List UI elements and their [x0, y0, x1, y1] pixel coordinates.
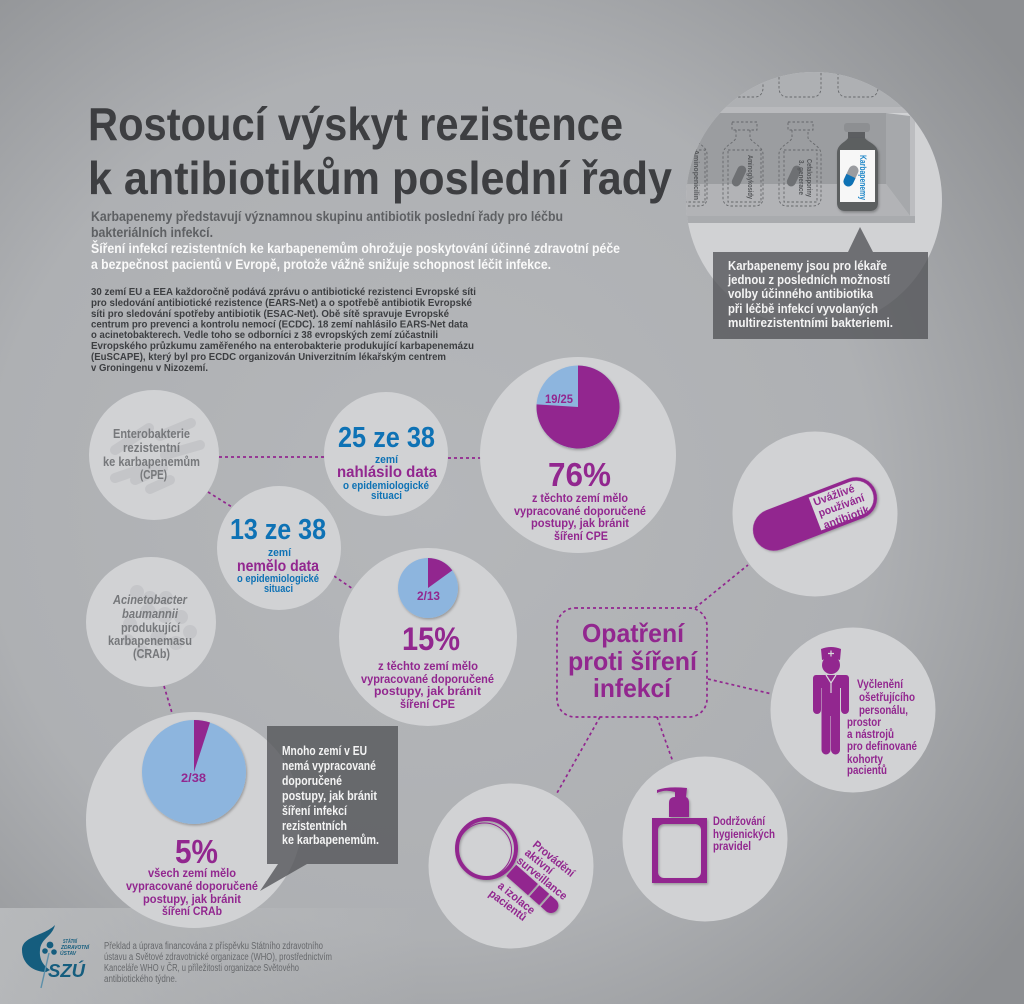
icon: capsule [747, 471, 883, 557]
intro text: Karbapenemy představují významnou skupinu antibiotik poslední řady pro léčbu [91, 208, 563, 224]
panel: 5 percent [86, 712, 302, 928]
panel: 76 percent: 76% [548, 456, 611, 493]
panel: 15 percent: 2/13 [417, 589, 440, 603]
panel: prudent antibiotic use: používání [817, 492, 867, 520]
callout: carbapenems: při léčbě infekcí vyvolaných [728, 301, 878, 316]
intro text: Šíření infekcí rezistentních ke karbapenemům ohrožuje poskytování účinné zdravotní péče [91, 239, 620, 256]
panel: 15 percent: postupy, jak bránit [374, 684, 481, 698]
callout: missing guidelines: Mnoho zemí v EU [282, 743, 367, 758]
panel: 76 percent: z těchto zemí mělo [532, 491, 628, 505]
panel: 5 percent: šíření CRAb [162, 904, 222, 918]
pie chart: 2/38 [142, 720, 246, 824]
panel: dedicated staff [770, 628, 936, 792]
panel: surveillance: aktivní [522, 847, 556, 878]
panel: 25 of 38 countries: nahlásilo data [337, 464, 437, 481]
panel: 15 percent: z těchto zemí mělo [378, 659, 478, 673]
pie chart: 19/25 [536, 366, 620, 448]
panel: CPE bacteria: rezistentní [123, 440, 180, 455]
panel: measures heading: infekcí [593, 673, 672, 703]
panel: 13 of 38 countries: situaci [264, 583, 293, 595]
body text: Evropského průzkumu zaměřeného na enterobakterie produkující karbapenemázu [91, 340, 474, 352]
panel: 25 of 38 countries: situaci [371, 490, 402, 502]
body text: centrum pro prevenci a kontrolu nemocí (ECDC). 18 zemí nahlásilo EARS-Net data [91, 318, 468, 330]
panel: 25 of 38 countries [324, 392, 448, 516]
panel: measures heading [557, 608, 707, 717]
panel: CPE bacteria [89, 390, 219, 520]
panel: dedicated staff: prostor [847, 717, 881, 729]
callout: carbapenems: jednou z posledních možností [727, 272, 890, 287]
panel: hygiene: hygienických [713, 829, 775, 841]
icon: grey capsules [732, 166, 802, 186]
panel: dedicated staff: personálu, [859, 705, 908, 717]
panel: surveillance: a izolace [495, 880, 537, 917]
panel: dedicated staff: kohorty [847, 754, 884, 766]
panel: 76 percent: vypracované doporučené [514, 504, 646, 518]
panel: 5 percent: postupy, jak bránit [143, 892, 241, 906]
panel: CPE bacteria: Enterobakterie [113, 426, 190, 441]
panel: 5 percent: 5% [175, 833, 218, 870]
panel: prudent antibiotic use: Uvážlivé [812, 483, 856, 509]
body text: síti pro sledování spotřeby antibiotik (ESAC-Net). Obě sítě spravuje Evropské [91, 308, 449, 320]
panel: surveillance [428, 784, 594, 948]
panel: 76 percent [480, 357, 676, 553]
body text: v Groningenu v Nizozemí. [91, 362, 208, 374]
panel: CRAb bacteria: (CRAb) [133, 646, 170, 661]
intro text: a bezpečnost pacientů v Evropě, protože vážně snižuje schopnost léčit infekce. [91, 256, 551, 272]
panel: 5 percent: 2/38 [181, 771, 206, 785]
panel: 25 of 38 countries: o epidemiologické [343, 480, 429, 492]
shelf bottle labels: Aminopenicilin [692, 150, 701, 200]
callout: missing guidelines [260, 726, 398, 891]
panel: 5 percent: všech zemí mělo [148, 866, 236, 880]
body text: o acinetobakterech. Vedle toho se odborníci z 38 evropských zemí zúčastnili [91, 329, 438, 341]
panel: dedicated staff: pacientů [847, 765, 887, 777]
callout: missing guidelines: ke karbapenemům. [282, 832, 379, 847]
body text: (EuSCAPE), který byl pro ECDC organizován Univerzitním lékařským centrem [91, 351, 446, 363]
panel: hygiene: Dodržování [713, 816, 766, 828]
icon: carbapenem bottle: Karbapenemy [858, 155, 868, 200]
panel: measures heading: proti šíření [568, 646, 698, 676]
panel: hygiene: pravidel [713, 841, 751, 853]
panel: measures heading: Opatření [582, 618, 685, 648]
panel: 13 of 38 countries: 13 ze 38 [230, 514, 326, 546]
pie chart: 2/13 [398, 558, 458, 618]
connector lines [164, 457, 772, 793]
body text [91, 286, 476, 374]
panel: CRAb bacteria: baumannii [122, 606, 178, 621]
logo: SZU: ZDRAVOTNÍ [60, 944, 90, 951]
callout: missing guidelines: doporučené [282, 773, 342, 788]
panel: 15 percent: vypracované doporučené [361, 672, 494, 686]
panel: surveillance: pacientů [486, 888, 529, 924]
panel: dedicated staff: pro definované [847, 741, 917, 753]
panel: 76 percent: šíření CPE [554, 529, 608, 543]
panel: 25 of 38 countries: zemí [375, 454, 399, 466]
panel: CRAb bacteria: produkující [121, 620, 180, 635]
intro text: bakteriálních infekcí. [91, 224, 213, 240]
shelf bottle labels [692, 150, 814, 200]
title: k antibiotikům poslední řady [88, 152, 672, 204]
icon: soap dispenser [652, 787, 707, 883]
callout: missing guidelines: rezistentních [282, 818, 347, 833]
panel: surveillance: Provádění [530, 839, 577, 880]
callout: carbapenems: Karbapenemy jsou pro lékaře [728, 258, 887, 273]
title: Rostoucí výskyt rezistence [88, 98, 623, 150]
panel: 76 percent: 19/25 [545, 392, 573, 406]
panel: prudent antibiotic use: antibiotik [822, 504, 872, 532]
panel: CRAb bacteria: Acinetobacter [112, 592, 188, 607]
panel: 13 of 38 countries: o epidemiologické [237, 573, 319, 585]
logo: SZU: SZÚ [48, 960, 86, 981]
callout: missing guidelines: šíření infekcí [282, 803, 347, 818]
shelf bottle labels: Aminoglykosidy [746, 155, 755, 200]
panel: 13 of 38 countries: nemělo data [237, 558, 319, 575]
panel: 25 of 38 countries: 25 ze 38 [338, 422, 435, 454]
panel: CPE bacteria: (CPE) [140, 467, 167, 482]
logo: SZU [22, 925, 90, 988]
footer text: ústavu a Světové zdravotnické organizace (WHO), prostřednictvím [104, 952, 332, 963]
footer text [104, 941, 332, 985]
panel: hygiene [622, 756, 788, 922]
body text: pro sledování antibiotické rezistence (EARS-Net) a o spotřebě antibiotik Evropské [91, 297, 472, 309]
body text: 30 zemí EU a EEA každoročně podává zprávu o antibiotické rezistenci Evropské síti [91, 286, 476, 298]
logo: SZU: STÁTNÍ [63, 938, 78, 945]
icon: carbapenem bottle [837, 123, 878, 211]
icon: rod bacteria [115, 423, 200, 489]
panel: dedicated staff: a nástrojů [847, 729, 894, 741]
panel: prudent antibiotic use [732, 432, 898, 596]
footer text: Kanceláře WHO v ČR, u příležitosti organizace Světového [104, 961, 299, 974]
panel: CRAb bacteria: karbapenemasu [108, 633, 192, 648]
callout: carbapenems: multirezistentními bakteriemi. [728, 315, 893, 330]
panel: 13 of 38 countries: zemí [268, 547, 292, 559]
title [88, 98, 672, 204]
panel: dedicated staff: Vyčlenění [857, 679, 904, 691]
icon: magnifying glass [457, 819, 561, 916]
footer text: antibiotického týdne. [104, 974, 177, 985]
panel: dedicated staff: ošetřujícího [859, 692, 915, 704]
icon: nurse [813, 647, 849, 754]
callout: carbapenems: volby účinného antibiotika [728, 286, 874, 301]
intro text [91, 208, 620, 272]
icon: cocci bacteria [122, 585, 197, 659]
panel: CPE bacteria: ke karbapenemům [103, 454, 200, 469]
callout: missing guidelines: nemá vypracované [282, 758, 376, 773]
callout: missing guidelines: postupy, jak bránit [282, 788, 378, 803]
panel: 13 of 38 countries [217, 486, 341, 610]
panel: surveillance: surveillance [514, 855, 569, 903]
panel: 15 percent: 15% [402, 621, 460, 657]
shelf bottle labels: 3. generace [797, 160, 806, 195]
shelf bottle labels: Cefalosporiny [805, 159, 814, 198]
illustration: antibiotic shelf [686, 72, 942, 306]
callout: carbapenems [713, 227, 928, 339]
logo: SZU: ÚSTAV [60, 950, 77, 957]
panel: 5 percent: vypracované doporučené [126, 879, 258, 893]
panel: 15 percent: šíření CPE [400, 697, 455, 711]
panel: CRAb bacteria [86, 557, 216, 687]
panel: 15 percent [339, 548, 517, 726]
footer text: Překlad a úprava financována z příspěvku Státního zdravotního [104, 941, 323, 952]
panel: 76 percent: postupy, jak bránit [531, 516, 629, 530]
